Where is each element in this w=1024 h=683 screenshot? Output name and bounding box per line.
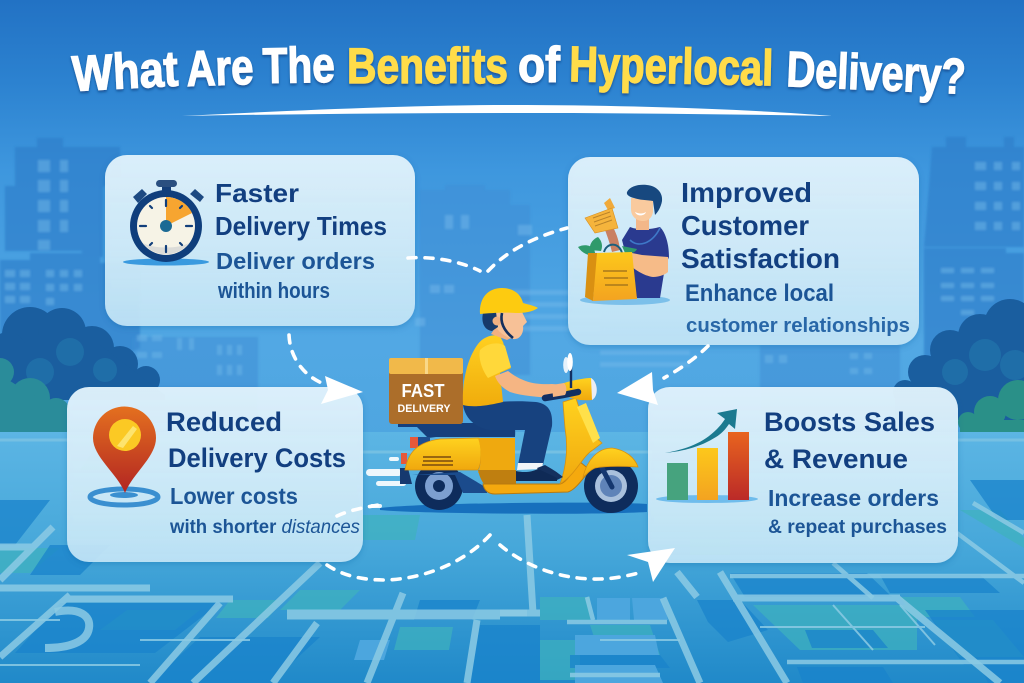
title <box>71 36 967 105</box>
panel: boosts sales: & Revenue <box>764 444 908 474</box>
icon: stopwatch <box>123 180 209 266</box>
rider arm <box>495 371 566 398</box>
heading: Faster <box>215 178 299 208</box>
body text: Deliver orders <box>216 248 375 274</box>
panel: improved customer satisfaction: customer relationships <box>686 315 910 337</box>
heading: Boosts Sales <box>764 407 935 437</box>
delivery rider on scooter <box>366 288 647 514</box>
rider torso <box>463 335 511 406</box>
title: Delivery? <box>786 41 967 105</box>
panel: reduced delivery costs <box>67 387 363 562</box>
map blocks: blue <box>0 480 1024 683</box>
rider head <box>491 325 513 340</box>
icon: customer with shopping bag <box>578 185 670 305</box>
handlebar and headlight <box>557 378 596 400</box>
delivery box <box>389 358 463 424</box>
front wheel <box>584 459 638 513</box>
panel: improved customer satisfaction: Satisfaction <box>681 243 840 274</box>
right buildings <box>924 137 1024 373</box>
title: The <box>262 37 335 94</box>
icon: location pin <box>90 406 158 505</box>
dashed route arrows <box>289 228 708 580</box>
title: of <box>518 37 560 93</box>
title: Benefits <box>347 38 508 94</box>
map roads <box>0 440 1024 683</box>
heading: Improved <box>681 177 812 208</box>
arrowheads <box>321 372 675 582</box>
panel: reduced delivery costs: with shorter distances <box>169 517 360 538</box>
panel: faster delivery <box>105 155 415 326</box>
heading: Reduced <box>166 407 282 437</box>
panel: improved customer satisfaction: Customer <box>681 210 809 241</box>
delivery box: FAST <box>402 381 444 401</box>
icon: growth bar chart <box>656 409 758 503</box>
rider legs <box>463 401 552 465</box>
panel: improved customer satisfaction <box>568 157 919 345</box>
speed lines <box>366 457 406 508</box>
panel: faster delivery: Delivery Times <box>215 211 387 241</box>
scooter body <box>405 438 481 470</box>
title: Are <box>185 39 254 97</box>
bushes right <box>893 299 1024 432</box>
panel: reduced delivery costs: Delivery Costs <box>168 443 346 473</box>
ground shadow <box>380 503 647 514</box>
body text: Increase orders <box>768 485 939 511</box>
skyline windows <box>5 160 1020 375</box>
panel: boosts sales: & repeat purchases <box>768 517 947 538</box>
body text: Lower costs <box>170 483 298 509</box>
title: Hyperlocal <box>569 36 774 96</box>
panel: faster delivery: within hours <box>217 278 330 303</box>
title: What <box>71 40 180 102</box>
body text: Enhance local <box>685 280 834 307</box>
city skyline <box>0 137 1024 427</box>
map blocks: teal <box>0 440 1024 680</box>
bushes left <box>0 307 165 432</box>
delivery box: DELIVERY <box>398 403 451 415</box>
ground map <box>0 432 1024 683</box>
left buildings <box>0 138 140 378</box>
rear wheel <box>415 462 463 510</box>
panel: boosts sales <box>648 387 958 563</box>
title underline <box>182 105 832 116</box>
seat and rack <box>398 423 515 438</box>
